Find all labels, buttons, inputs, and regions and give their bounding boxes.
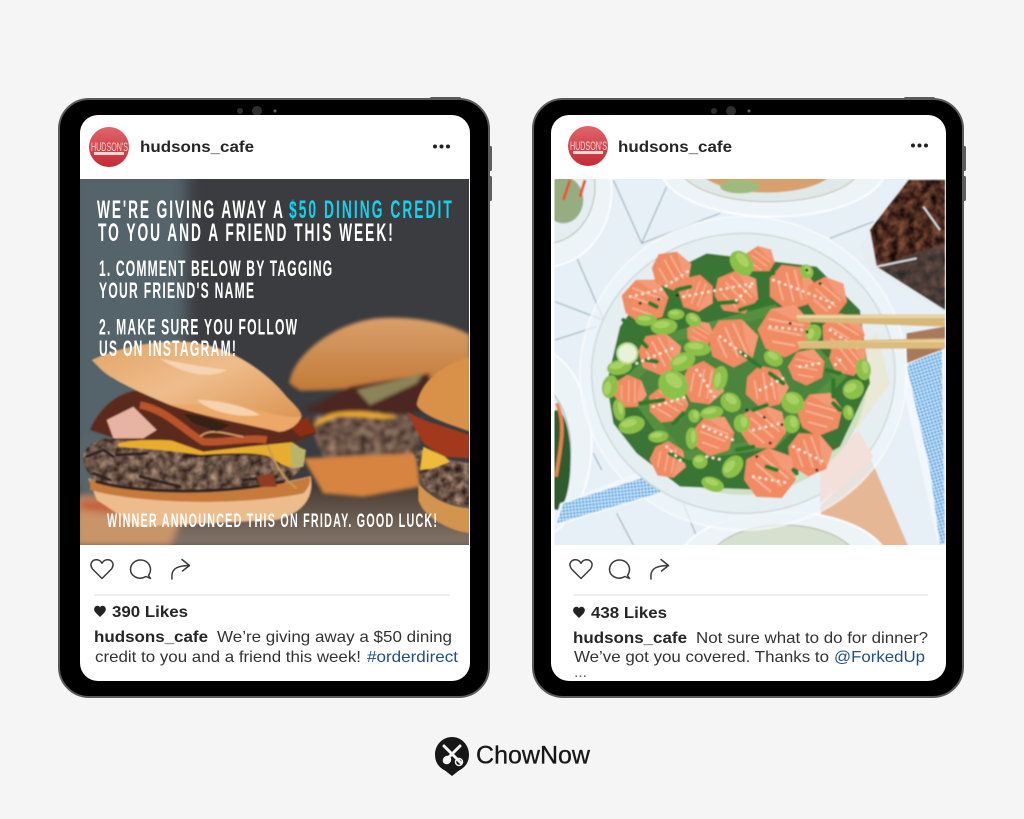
caption left [94,629,459,666]
poke bowl photo [554,179,946,545]
post text: offer: US ON INSTAGRAM! [99,336,236,361]
post text: offer: 1. COMMENT BELOW BY TAGGING [99,256,332,281]
towel lower left [558,480,642,522]
profile avatar right [568,126,608,166]
post text: offer: WE'RE GIVING AWAY A [97,197,283,224]
post text: offer [97,197,452,532]
likes left: 390 Likes [112,604,188,621]
profile avatar right: HUDSON'S [570,139,607,153]
main bowl [580,217,907,530]
chopsticks [797,315,945,327]
more menu right [911,144,928,148]
edamame [600,246,873,495]
granola bag [870,179,946,310]
greens [607,253,870,490]
divider strokes [94,594,928,596]
caption left: hudsons_cafe [94,629,208,646]
caption right: hudsons_cafe [573,630,687,647]
scallions [623,273,840,473]
icon: fork and spoon pin [435,737,469,776]
caption left: #orderdirect [367,649,459,666]
caption right: Not sure what to do for dinner? [696,630,928,647]
bacon [90,390,317,452]
post text: offer: $50 DINING CREDIT [289,197,452,224]
post text: offer: YOUR FRIEND'S NAME [99,278,254,303]
table tiles [555,180,873,545]
caption right [574,632,928,677]
towel right [906,348,946,544]
profile avatar left [89,127,129,167]
tablet: right poke bowl post [468,97,966,697]
username right: hudsons_cafe [618,139,732,156]
username left: hudsons_cafe [140,139,254,156]
tablet: left giveaway post [59,97,492,697]
tablet frame right [533,97,966,697]
screen left [80,115,470,681]
more menu left [433,144,450,148]
ChowNow logo [435,737,591,776]
caption right: ... [574,664,587,681]
caption right: We’ve got you covered. Thanks to [574,649,829,666]
rice [700,393,866,496]
caption left: credit to you and a friend this week! [95,649,361,666]
wooden board [820,459,908,545]
post text: offer: 2. MAKE SURE YOU FOLLOW [99,315,297,339]
salmon [608,244,872,503]
wordmark: ChowNow [476,742,591,770]
sesame seeds [630,270,860,483]
back burger [289,318,470,497]
cheese [118,440,305,468]
caption right: @ForkedUp [834,649,925,666]
bottom bun [88,476,312,527]
caption left: We’re giving away a $50 dining [217,629,452,646]
screen right [551,115,946,681]
profile avatar left: HUDSON'S [91,140,128,154]
action icons right [570,560,668,579]
burger photo [70,170,483,547]
action icons left [91,560,190,579]
tablet frame left [59,97,492,697]
post text: offer: WINNER ANNOUNCED THIS ON FRIDAY. GOOD LUCK! [107,511,437,532]
likes right: 438 Likes [591,605,667,622]
post text: offer: TO YOU AND A FRIEND THIS WEEK! [98,220,393,247]
right burger [417,357,470,432]
top bun [91,340,303,418]
patty [83,437,305,492]
neighbour bowls [662,179,884,218]
